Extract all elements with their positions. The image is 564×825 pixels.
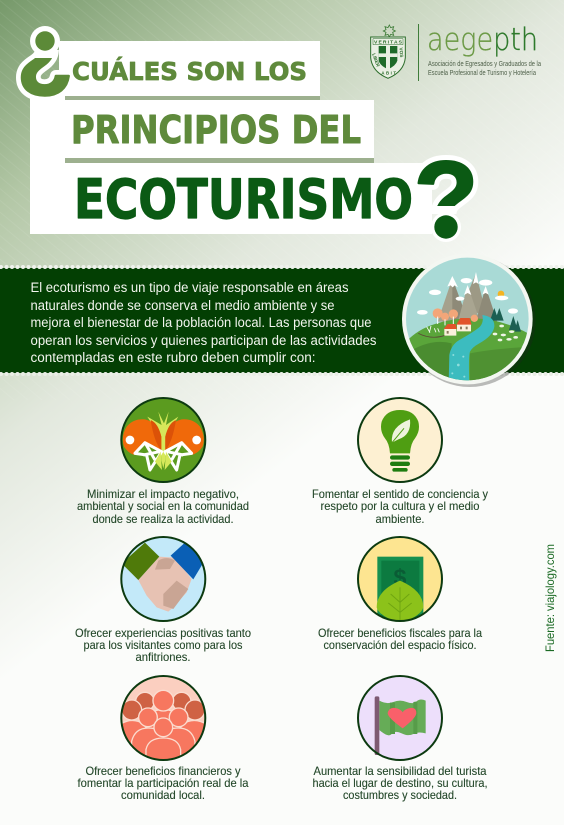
icon: shield	[371, 25, 405, 78]
intro text: El ecoturismo es un tipo de viaje responsable en áreas	[30, 280, 349, 295]
icon: light bulb with leaf	[358, 398, 442, 482]
text: principle 1: donde se realiza la actividad.	[92, 512, 234, 526]
text: principle 5: comunidad local.	[121, 788, 205, 802]
text: principle 6: Aumentar la sensibilidad del turista	[314, 764, 487, 778]
text: principle 4: Ofrecer beneficios fiscales para la	[318, 626, 482, 640]
principle 2	[312, 398, 488, 526]
intro band	[0, 267, 564, 374]
title	[16, 26, 478, 242]
logo caption	[428, 61, 541, 77]
opening question mark	[16, 26, 70, 99]
text: principle 3: Ofrecer experiencias positivas tanto	[75, 626, 251, 640]
text: principle 1	[77, 487, 249, 526]
icon: banknote and leaf	[358, 537, 442, 624]
text: principle 3	[75, 626, 251, 664]
logo: university shield and aegepth	[371, 22, 541, 81]
principle 4	[318, 537, 482, 652]
text: principle 6: costumbres y sociedad.	[343, 788, 457, 802]
text: principle 2: ambiente.	[376, 512, 424, 526]
text: principle 5: Ofrecer beneficios financieros y	[86, 764, 240, 778]
title panel white boxes	[30, 41, 432, 234]
intro text: naturales donde se conserva el medio ambiente y se	[30, 298, 334, 313]
icon: handshake	[121, 537, 205, 621]
intro text: mejora el bienestar de la población local. Las personas que	[30, 315, 372, 330]
text: principle 5: fomentar la participación real de la	[78, 776, 249, 790]
icon: shield: VOS	[398, 47, 404, 58]
closing question mark: ?	[414, 140, 478, 258]
icon: group of people	[120, 676, 207, 761]
text: principle 2: Fomentar el sentido de conciencia y	[312, 487, 488, 501]
closing question mark: ?	[414, 140, 478, 258]
icon: shield: VERITAS	[374, 40, 403, 46]
text: principle 3: para los visitantes como para los	[84, 638, 242, 652]
opening question mark: ¿	[17, 0, 73, 100]
text: principle 3: anfitriones.	[136, 650, 190, 664]
text: principle 2: respeto por la cultura y el medio	[320, 499, 480, 513]
icon: butterfly	[121, 398, 205, 482]
icon: banknote and leaf: $	[394, 565, 407, 591]
opening question mark: ¿	[17, 0, 73, 100]
icon: landscape illustration	[402, 258, 536, 387]
title line 3: ECOTURISMO	[74, 168, 413, 231]
icon: shield: ABIT	[381, 70, 396, 75]
text: principle 1: ambiental y social en la comunidad	[77, 499, 249, 513]
text: principle 1: Minimizar el impacto negativo,	[87, 487, 239, 501]
title line 1: CUÁLES SON LOS	[72, 57, 307, 86]
source credit: Fuente: viajology.com	[543, 544, 557, 652]
principle 1	[77, 398, 249, 526]
title line 2: PRINCIPIOS DEL	[71, 108, 361, 152]
text: principle 4	[318, 626, 482, 652]
logo divider	[418, 24, 419, 81]
closing question mark	[418, 155, 478, 242]
icon: shield: LIBER	[371, 53, 381, 68]
logo caption: Asociación de Egresados y Graduados de la	[428, 61, 541, 68]
principle 3	[75, 537, 251, 664]
intro text	[30, 280, 377, 365]
principle 6	[312, 676, 488, 802]
text: principle 6: hacia el lugar de destino, su cultura,	[312, 776, 488, 790]
text: principle 5	[78, 764, 249, 802]
logo wordmark: aegepth	[427, 22, 538, 58]
principle 5	[78, 676, 249, 802]
intro text: contempladas en este rubro deben cumplir con:	[30, 350, 316, 365]
logo caption: Escuela Profesional de Turismo y Hotelería	[428, 70, 536, 77]
text: principle 6	[312, 764, 488, 802]
intro text: operan los servicios y quienes participan de las actividades	[30, 333, 377, 348]
icon: flag with heart	[358, 676, 442, 760]
text: principle 4: conservación del espacio físico.	[324, 638, 476, 652]
text: principle 2	[312, 487, 488, 526]
